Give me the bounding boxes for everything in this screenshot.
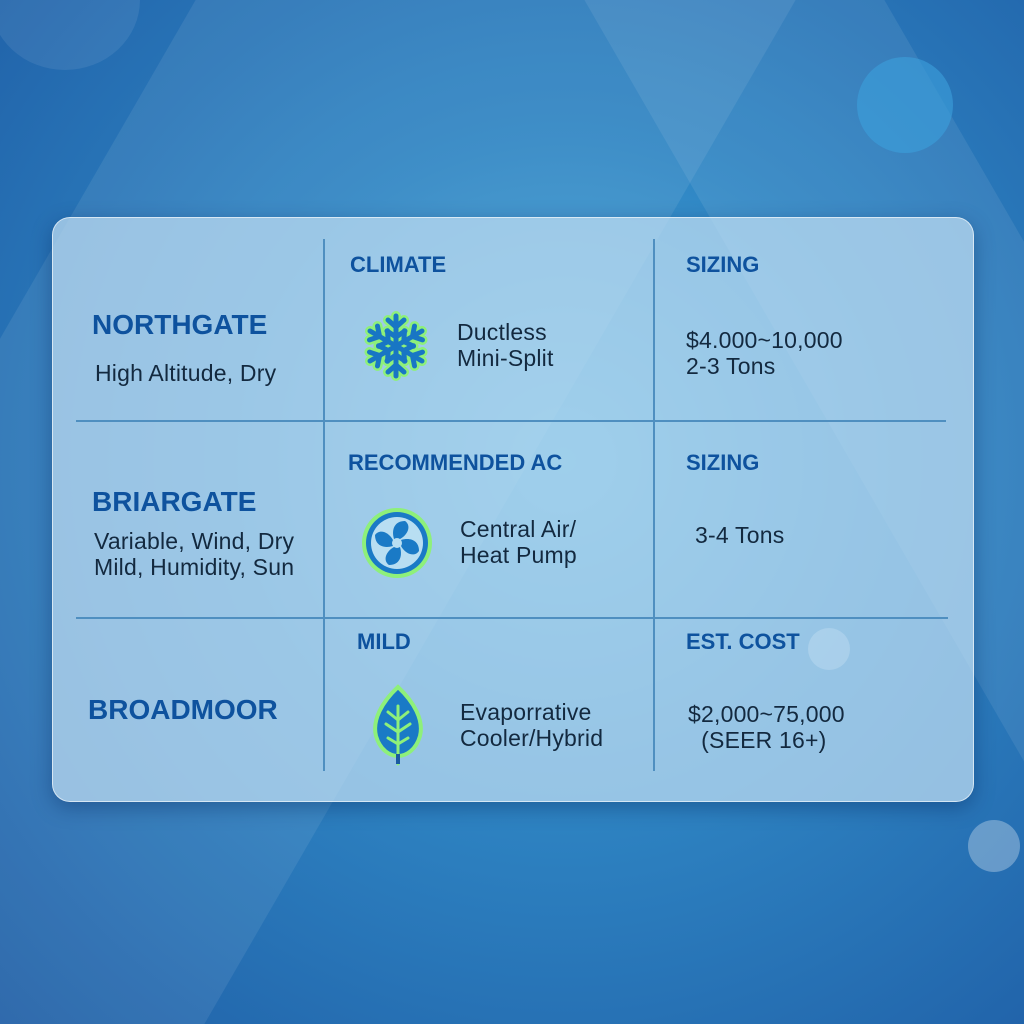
text: evaporative cooler: Cooler/Hybrid	[460, 725, 603, 751]
icon: leaf	[373, 684, 423, 766]
text: ductless mini-split: Mini-Split	[457, 345, 554, 371]
header: recommended AC: RECOMMENDED AC	[348, 450, 562, 475]
header: sizing 2: SIZING	[686, 450, 759, 475]
header: est cost: EST. COST	[686, 629, 800, 654]
text: evaporative cooler	[460, 699, 603, 751]
row 2: Briargate climate	[94, 528, 294, 580]
row 1: Northgate name: NORTHGATE	[92, 309, 267, 340]
text: ductless mini-split	[457, 319, 554, 371]
header: climate: CLIMATE	[350, 252, 446, 277]
row 2: Briargate name: BRIARGATE	[92, 486, 256, 517]
text: central air: Heat Pump	[460, 542, 577, 568]
icon: snowflake	[364, 311, 428, 381]
text: cost and tons row 1: $4.000~10,000	[686, 327, 843, 353]
header: mild: MILD	[357, 629, 411, 654]
row 2: Briargate climate: Variable, Wind, Dry	[94, 528, 294, 554]
text: cost and tons row 1: 2-3 Tons	[686, 353, 775, 379]
text: evaporative cooler: Evaporrative	[460, 699, 592, 725]
row 2: Briargate climate: Mild, Humidity, Sun	[94, 554, 294, 580]
text: cost and tons row 1	[686, 327, 843, 379]
text: ductless mini-split: Ductless	[457, 319, 547, 345]
text: cost row 3: $2,000~75,000	[688, 701, 845, 727]
header: sizing 1: SIZING	[686, 252, 759, 277]
row 1: Northgate climate: High Altitude, Dry	[95, 360, 276, 386]
row 3: Broadmoor name: BROADMOOR	[88, 694, 278, 725]
text: 3-4 tons: 3-4 Tons	[695, 522, 784, 548]
text: central air: Central Air/	[460, 516, 576, 542]
text: cost row 3: (SEER 16+)	[701, 727, 827, 753]
text: cost row 3	[688, 701, 845, 753]
icon: fan	[362, 508, 432, 578]
text: central air	[460, 516, 577, 568]
panel: table card	[52, 217, 974, 802]
